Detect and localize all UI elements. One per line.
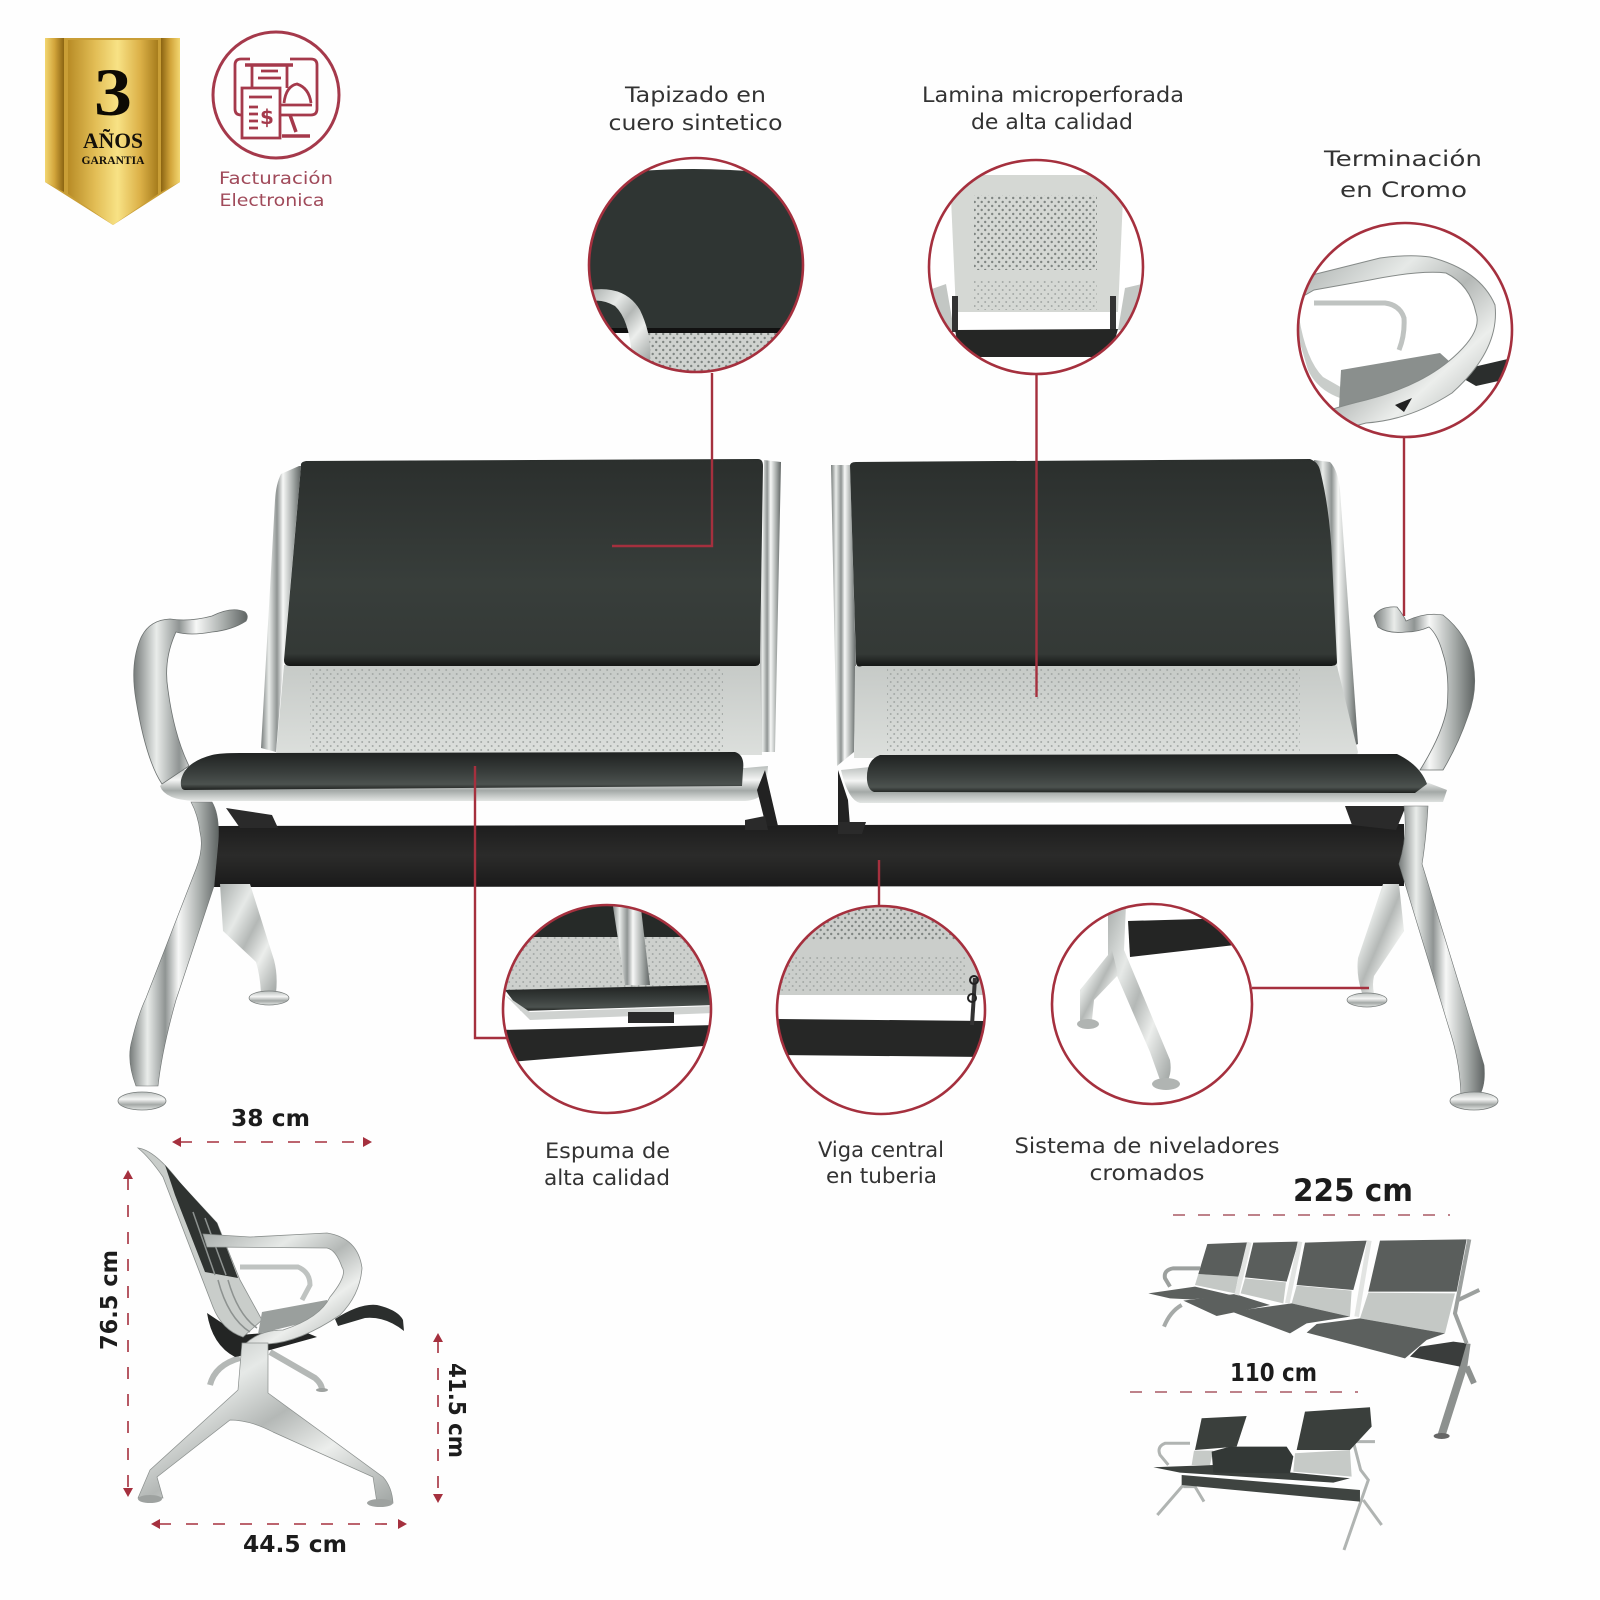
label: chrome finish: Terminación	[1323, 147, 1482, 171]
label: chrome finish	[1323, 147, 1482, 202]
front seat edge	[335, 1305, 404, 1331]
detail circle: perforated sheet	[925, 155, 1150, 380]
under-seat shadow	[1410, 1342, 1467, 1367]
electronic invoicing icon	[213, 32, 339, 158]
dark under-seat	[207, 1313, 317, 1357]
left front leg	[130, 802, 218, 1086]
detail circle: upholstery	[585, 155, 810, 380]
detail circle: central beam	[775, 903, 990, 1118]
label: upholstery: cuero sintetico	[608, 111, 782, 135]
detail circle: chrome levelers	[1050, 903, 1255, 1108]
main two-seat bench	[118, 459, 1498, 1110]
base feet	[138, 1388, 393, 1507]
label: foam: Espuma de	[545, 1139, 670, 1163]
label: perforated sheet	[922, 83, 1184, 134]
seat cushions	[1148, 1287, 1445, 1358]
detail circle: foam	[500, 900, 715, 1120]
label: chrome finish: en Cromo	[1340, 178, 1467, 202]
left rear leg	[220, 884, 277, 993]
warranty badge: 3	[94, 54, 132, 130]
dimension: 76.5 cm: 76.5 cm	[97, 1250, 123, 1350]
warranty badge: GARANTIA	[82, 155, 145, 167]
label: perforated sheet: de alta calidad	[971, 110, 1133, 134]
panels	[1192, 1450, 1352, 1477]
table cushions	[1212, 1447, 1293, 1473]
end frame and arms	[1165, 1239, 1479, 1343]
dimension: 38 cm: 38 cm	[231, 1106, 310, 1132]
dimension: 44.5 cm	[151, 1519, 407, 1558]
rear leg and under-seat	[1164, 1305, 1474, 1435]
callout lines	[475, 373, 1404, 1038]
two-seat bench with table thumbnail	[1153, 1407, 1382, 1550]
dimension: 110 cm: 110 cm	[1230, 1358, 1317, 1387]
seat top	[258, 1300, 332, 1334]
right bench seat assembly	[831, 459, 1447, 834]
label: perforated sheet: Lamina microperforada	[922, 83, 1184, 107]
armrest loop	[203, 1233, 362, 1344]
four-seat bench thumbnail	[1148, 1239, 1479, 1439]
right armrest	[1374, 607, 1475, 770]
right rear leg	[1358, 884, 1404, 993]
backrest stripes	[193, 1212, 257, 1332]
electronic invoicing icon: $	[260, 105, 274, 129]
dimension: 41.5 cm	[433, 1333, 469, 1503]
callout labels	[544, 83, 1482, 1190]
invoicing label: Facturación	[219, 169, 333, 189]
left armrest	[134, 610, 247, 784]
invoicing label	[219, 169, 333, 211]
label: levelers: Sistema de niveladores	[1014, 1134, 1280, 1158]
back cushions	[1198, 1239, 1467, 1292]
left feet	[118, 991, 289, 1110]
lower panels	[1195, 1274, 1455, 1333]
warranty badge: AÑOS	[83, 128, 143, 153]
label: beam: en tuberia	[826, 1164, 937, 1188]
label: upholstery: Tapizado en	[624, 83, 766, 107]
chrome frame	[1237, 1241, 1369, 1317]
label: beam: Viga central	[818, 1138, 944, 1162]
label: upholstery	[608, 83, 782, 135]
warranty badge	[45, 38, 180, 225]
dimension: 76.5 cm	[97, 1170, 133, 1497]
label: foam: alta calidad	[544, 1166, 670, 1190]
dimension: 44.5 cm: 44.5 cm	[243, 1532, 347, 1558]
central beam	[214, 824, 1404, 887]
right feet	[1347, 993, 1498, 1110]
beam	[1182, 1475, 1360, 1502]
rear base legs	[210, 1352, 322, 1390]
arms and legs	[1157, 1442, 1382, 1550]
label: foam	[544, 1139, 670, 1190]
invoicing label: Electronica	[220, 191, 324, 211]
far armrest	[240, 1267, 310, 1300]
side view chair	[138, 1148, 404, 1507]
label: beam	[818, 1138, 944, 1188]
backrest profile	[138, 1148, 262, 1337]
left bench seat assembly	[160, 459, 781, 830]
dimension: 41.5 cm: 41.5 cm	[443, 1363, 469, 1458]
backrest cushion	[165, 1165, 238, 1278]
right front leg	[1399, 806, 1484, 1096]
dimension: 38 cm	[172, 1106, 372, 1147]
dimension: 225 cm: 225 cm	[1293, 1173, 1413, 1209]
central column and base	[138, 1343, 393, 1503]
label: levelers	[1014, 1134, 1280, 1185]
detail circle: chrome finish	[1295, 220, 1515, 440]
back cushions	[1195, 1407, 1372, 1450]
seats	[1153, 1465, 1350, 1483]
label: levelers: cromados	[1090, 1161, 1204, 1185]
